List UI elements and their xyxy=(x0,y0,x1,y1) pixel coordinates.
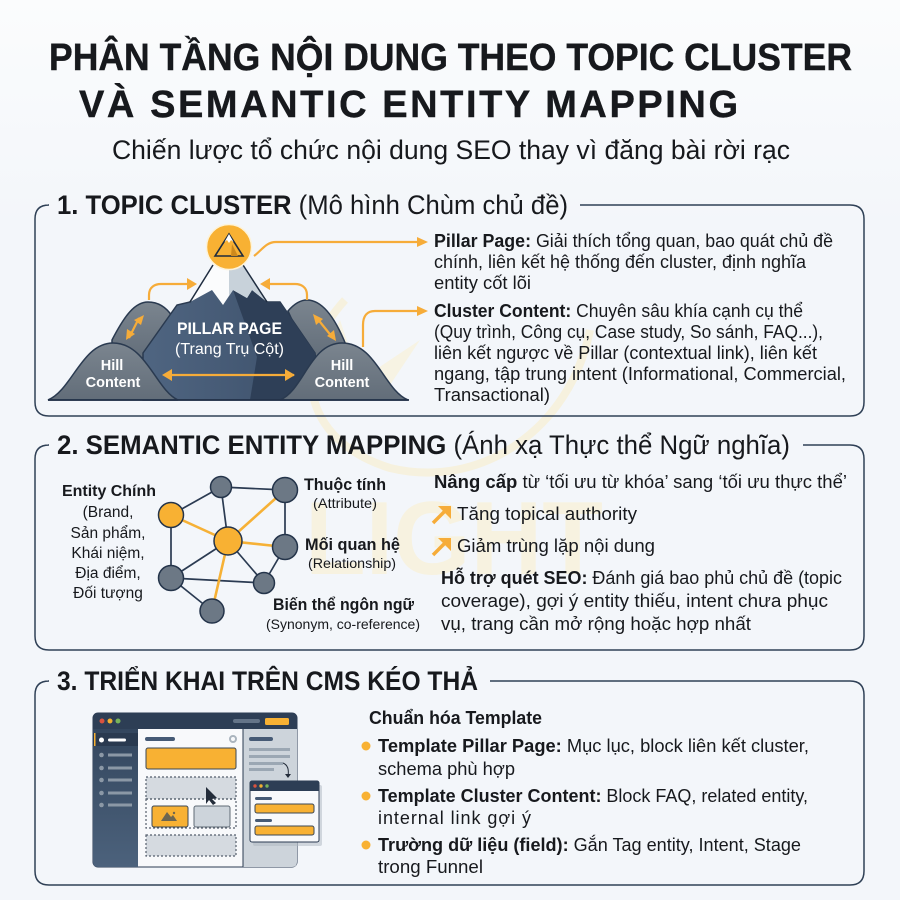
main mountain xyxy=(143,270,320,400)
label: biến thể ngôn ngữ xyxy=(266,595,420,632)
entity chính label: Khái niệm, xyxy=(71,545,145,562)
bullet: template cluster content: Template Cluster Content: Block FAQ, related entity, xyxy=(378,786,808,806)
bullet: template pillar page: schema phù hợp xyxy=(378,759,515,779)
back hill left xyxy=(112,302,172,360)
right lines xyxy=(249,737,273,741)
label: biến thể ngôn ngữ: Biến thể ngôn ngữ xyxy=(273,595,415,614)
bullet: template cluster content xyxy=(362,786,808,828)
title xyxy=(49,34,852,126)
main content blocks xyxy=(145,737,175,741)
label: pillar page xyxy=(175,319,284,358)
label: mối quan hệ: Mối quan hệ xyxy=(305,535,400,554)
diagram: mountain with hills xyxy=(48,224,428,400)
text: pillar page description xyxy=(434,231,833,293)
label: hill content right xyxy=(315,358,370,391)
label: mối quan hệ xyxy=(305,535,400,571)
text: nâng cấp: Nâng cấp từ ‘tối ưu từ khóa’ sang ‘tối ưu thực thể’ xyxy=(434,472,847,492)
label: pillar page: PILLAR PAGE xyxy=(177,319,282,338)
text: hỗ trợ quét seo xyxy=(441,567,842,634)
text: cluster content description: Cluster Content: Chuyên sâu khía cạnh cụ thể xyxy=(434,301,803,321)
right column xyxy=(243,729,297,867)
label: hill content right: Content xyxy=(315,375,370,391)
bullet: template pillar page: Template Pillar Page: Mục lục, block liên kết cluster, xyxy=(378,736,809,756)
label: thuộc tính: Thuộc tính xyxy=(304,475,386,494)
heading: cms: 3. TRIỂN KHAI TRÊN CMS KÉO THẢ xyxy=(57,664,478,696)
text: hỗ trợ quét seo: vụ, trang cần mở rộng hoặc hợp nhất xyxy=(441,614,751,634)
network graph xyxy=(158,476,298,623)
label: thuộc tính xyxy=(304,475,386,511)
bullet: template cluster content: internal link gợi ý xyxy=(378,808,531,828)
hill content right xyxy=(280,343,408,400)
bullet: trường dữ liệu xyxy=(362,834,801,877)
text: cluster content description: (Quy trình, Công cụ, Case study, So sánh, FAQ...), xyxy=(434,322,823,342)
top bar xyxy=(93,713,297,729)
label: biến thể ngôn ngữ: (Synonym, co-reference) xyxy=(266,616,420,632)
text: pillar page description: entity cốt lõi xyxy=(434,273,531,293)
title: VÀ SEMANTIC ENTITY MAPPING xyxy=(79,82,738,126)
panel 1 border xyxy=(35,205,864,416)
floating window xyxy=(250,781,322,846)
peak icon xyxy=(206,224,252,270)
entity chính label xyxy=(62,483,156,602)
heading: topic cluster: 1. TOPIC CLUSTER (Mô hình Chùm chủ đề) xyxy=(57,190,568,220)
bullet: trùng lặp: Giảm trùng lặp nội dung xyxy=(457,536,655,556)
bullet: template pillar page xyxy=(362,736,809,779)
label: pillar page: (Trang Trụ Cột) xyxy=(175,341,284,358)
label: mối quan hệ: (Relationship) xyxy=(308,555,396,571)
text: pillar page description: Pillar Page: Giải thích tổng quan, bao quát chủ đề xyxy=(434,231,833,251)
label: thuộc tính: (Attribute) xyxy=(313,495,377,511)
text: cluster content description xyxy=(434,301,846,405)
subheading: chuẩn hóa template: Chuẩn hóa Template xyxy=(369,708,542,728)
panel: topic cluster xyxy=(35,190,864,416)
label: hill content left xyxy=(86,358,141,391)
cursor xyxy=(206,787,217,805)
bullet: trường dữ liệu: Trường dữ liệu (field): Gắn Tag entity, Intent, Stage xyxy=(378,834,801,855)
panel 2 border xyxy=(35,445,864,650)
icon: arrow up xyxy=(433,506,451,523)
subtitle: Chiến lược tổ chức nội dung SEO thay vì đăng bài rời rạc xyxy=(112,135,790,165)
text: cluster content description: Transactional) xyxy=(434,385,550,405)
entity chính label: Entity Chính xyxy=(62,483,156,500)
hill content left xyxy=(48,343,178,400)
sidebar xyxy=(93,729,138,867)
text: hỗ trợ quét seo: coverage), gợi ý entity thiếu, intent chưa phục xyxy=(441,591,828,611)
infographic canvas: LIGHT xyxy=(305,481,603,597)
text: pillar page description: chính, liên kết hệ thống đến cluster, định nghĩa xyxy=(434,252,807,272)
label: hill content left: Hill xyxy=(101,358,123,374)
entity chính label: Địa điểm, xyxy=(75,565,141,582)
text: cluster content description: ngang, tập trung intent (Informational, Commercial, xyxy=(434,364,846,384)
icon: arrow up 2 xyxy=(433,538,451,555)
bullet: trường dữ liệu: trong Funnel xyxy=(378,857,483,877)
panel 3 border xyxy=(35,681,864,885)
orange arrows xyxy=(129,242,420,375)
title: PHÂN TẦNG NỘI DUNG THEO TOPIC CLUSTER xyxy=(49,34,852,79)
back hill right xyxy=(288,300,346,360)
label: hill content right: Hill xyxy=(331,358,353,374)
panel: semantic entity mapping xyxy=(35,430,864,650)
panel: cms xyxy=(35,664,864,885)
window body xyxy=(93,713,297,867)
bullet: topical authority: Tăng topical authority xyxy=(457,504,637,524)
text: hỗ trợ quét seo: Hỗ trợ quét SEO: Đánh giá bao phủ chủ đề (topic xyxy=(441,567,842,588)
baseline xyxy=(48,399,409,401)
label: hill content left: Content xyxy=(86,375,141,391)
cms mockup xyxy=(93,713,322,867)
entity chính label: Đối tượng xyxy=(73,585,143,602)
entity chính label: Sản phẩm, xyxy=(71,525,145,542)
text: cluster content description: liên kết ngược về Pillar (contextual link), liên kết xyxy=(434,343,817,363)
snow cap xyxy=(190,265,267,305)
entity chính label: (Brand, xyxy=(83,504,133,521)
heading: semantic entity mapping: 2. SEMANTIC ENTITY MAPPING (Ánh xạ Thực thể Ngữ nghĩa) xyxy=(57,430,790,460)
